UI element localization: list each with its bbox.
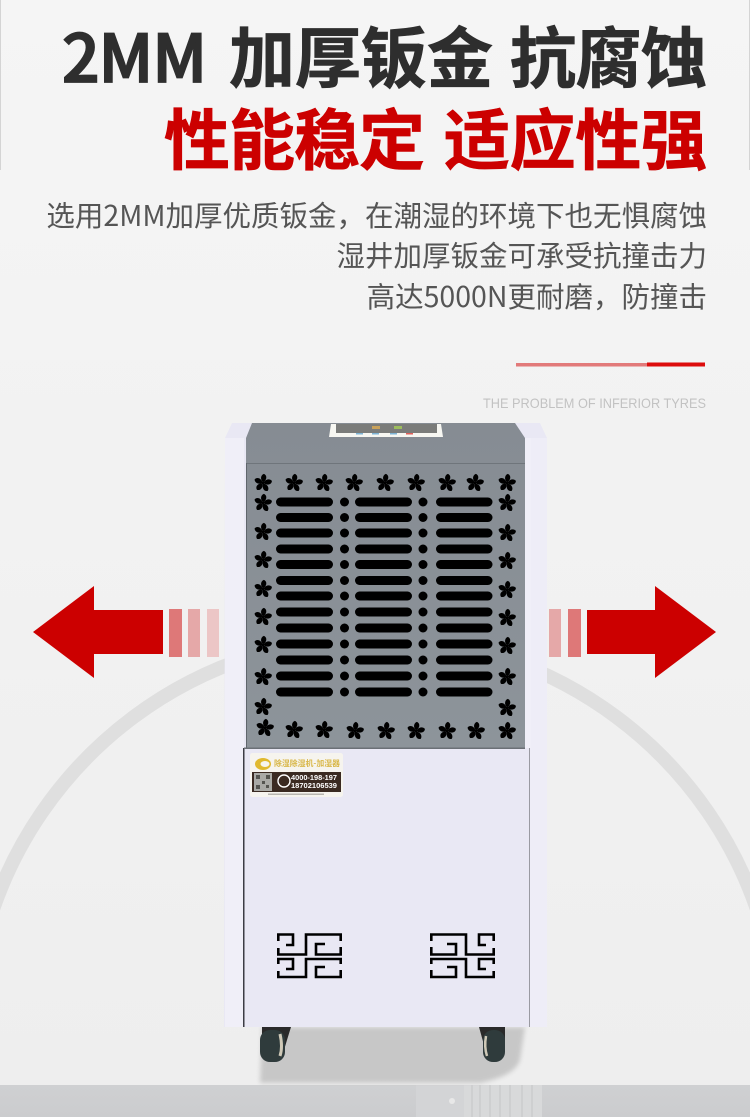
arrow: right [549,586,716,678]
description text [46,194,707,316]
brand sticker: 18702106539 [291,781,337,790]
english caption: THE PROBLEM OF INFERIOR TYRES [483,395,706,411]
title line 2 [164,88,707,184]
title line 1: 加厚钣金 [229,6,493,102]
vent slots [276,498,492,696]
title line 1: 2MM [62,6,207,102]
title line 1: 抗腐蚀 [510,6,707,102]
control panel [329,424,443,437]
brand sticker: 除湿除湿机-加湿器 [274,758,340,769]
background arc [0,637,750,925]
decorative key pattern right [431,934,494,977]
description text: 高达5000N更耐磨，防撞击 [367,275,707,316]
brand sticker [250,753,343,797]
title line 1 [62,6,707,102]
machine body [224,423,547,1027]
description text: 选用2MM加厚优质钣金，在潮湿的环境下也无惧腐蚀 [46,194,707,235]
description text: 湿井加厚钣金可承受抗撞击力 [336,234,707,275]
title line 2: 适应性强 [444,88,707,184]
brand sticker: 4000-198-197 [291,773,337,782]
floor strip [0,1085,750,1117]
vent flowers [251,472,518,742]
red accent line [516,362,705,366]
decorative key pattern left [278,934,341,977]
floor shadow [260,1027,525,1083]
title line 2: 性能稳定 [164,88,425,184]
wheels [260,1027,505,1062]
panel: grey vent top [246,423,525,748]
arrow: left [33,586,219,678]
